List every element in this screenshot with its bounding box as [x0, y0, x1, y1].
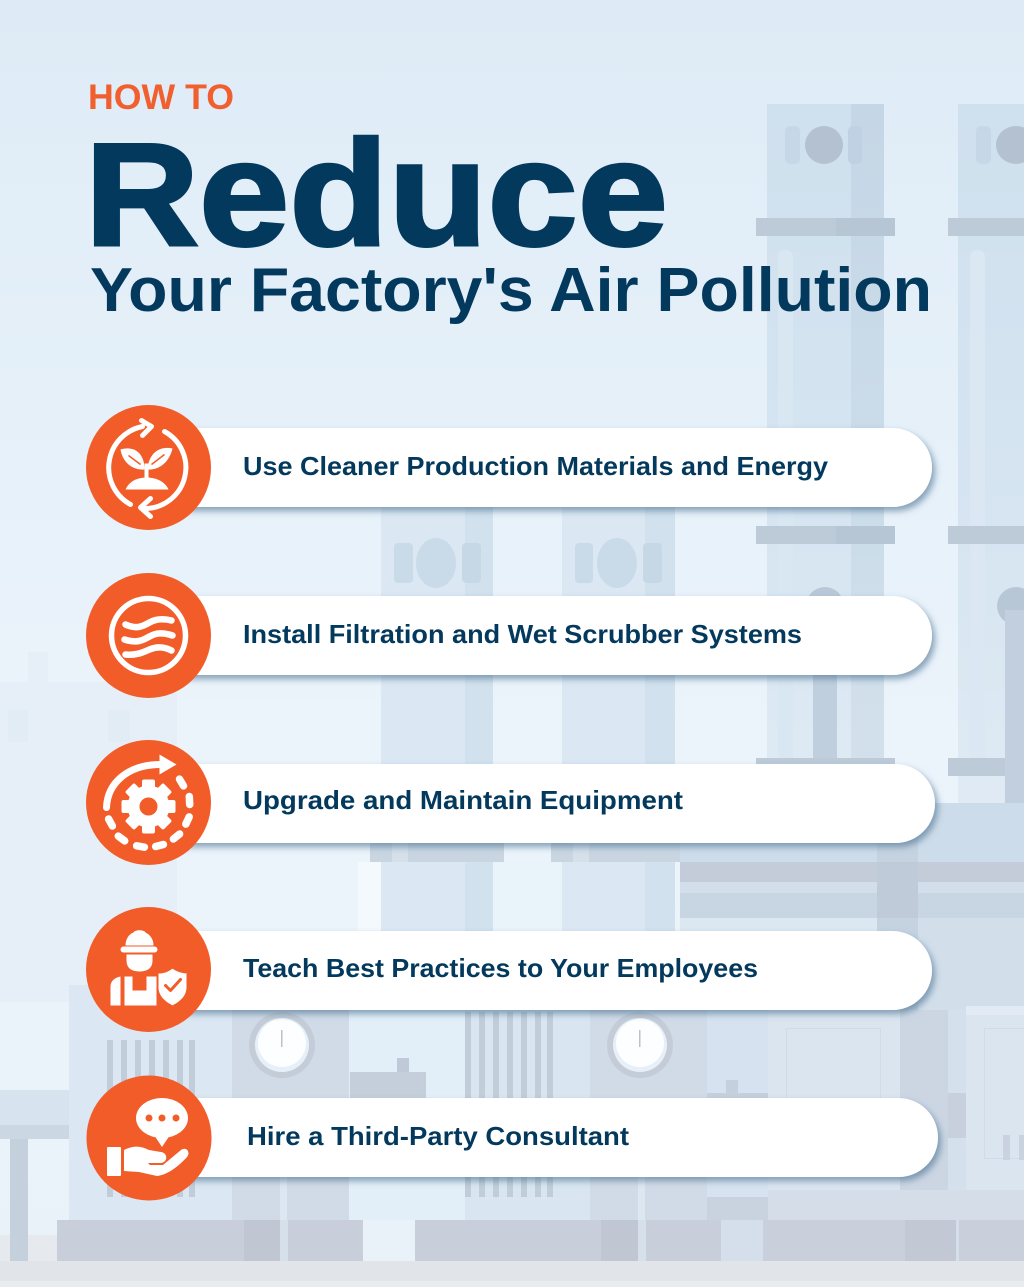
label 4: Teach Best Practices to Your Employees	[243, 953, 758, 983]
heading: how to: HOW TO	[88, 78, 234, 117]
base blocks	[57, 1220, 1024, 1261]
lower machinery	[69, 985, 1024, 1220]
middle towers	[358, 507, 685, 1010]
label 3: Upgrade and Maintain Equipment	[243, 785, 683, 815]
step 5	[86, 1076, 938, 1200]
pill 1	[150, 428, 932, 507]
icon: hand with speech bubble	[86, 1076, 212, 1200]
pill 2	[150, 596, 932, 675]
pill 4	[150, 931, 932, 1010]
step 1	[86, 405, 932, 530]
pill 3	[150, 764, 935, 843]
icon: air filter	[86, 573, 211, 698]
icon: gear with arrow	[86, 740, 211, 865]
pill 5	[150, 1098, 938, 1177]
vents	[107, 1012, 553, 1197]
label 2: Install Filtration and Wet Scrubber Systems	[243, 619, 802, 649]
left beam and post	[0, 1090, 69, 1261]
label 5: Hire a Third-Party Consultant	[247, 1121, 629, 1151]
step 4	[86, 907, 932, 1032]
title: reduce: Reduce	[85, 109, 668, 277]
tall tower left	[756, 104, 895, 824]
ground	[0, 1261, 1024, 1287]
step 3	[86, 740, 935, 865]
label 1: Use Cleaner Production Materials and Energy	[243, 451, 829, 481]
gauges	[249, 1012, 673, 1078]
tall tower right	[948, 104, 1024, 824]
subtitle: Your Factory's Air Pollution	[90, 256, 932, 325]
right pipework	[680, 803, 1024, 1010]
icon: plant with recycle arrows	[86, 405, 211, 530]
icon: worker with shield	[86, 907, 211, 1032]
step 2	[86, 573, 932, 698]
